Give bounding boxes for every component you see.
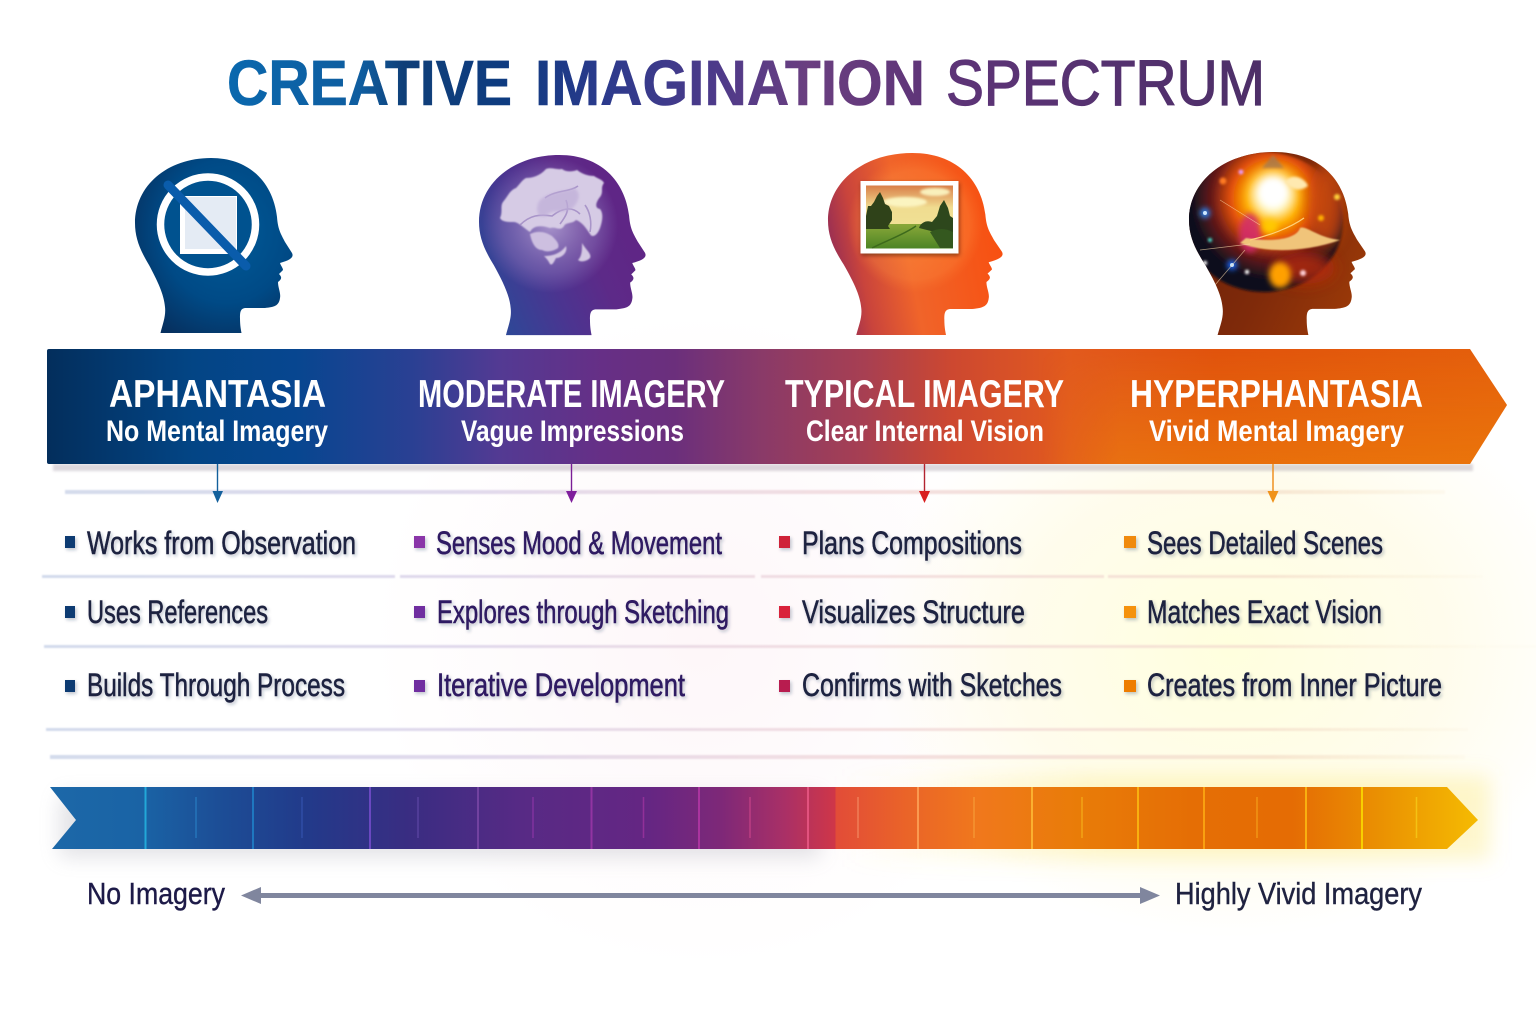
list: typical imagery traits: Plans Compositions: [802, 525, 1022, 561]
list: aphantasia traits: Builds Through Process: [87, 667, 345, 703]
label: highly vivid imagery: Highly Vivid Imagery: [1175, 876, 1422, 911]
list: moderate imagery traits: Senses Mood & Movement: [436, 525, 722, 561]
arrow: moderate: [566, 464, 577, 503]
list: moderate imagery traits: Explores through Sketching: [437, 594, 729, 630]
arrow: aphantasia: [212, 464, 223, 503]
arrow: hyper: [1268, 464, 1278, 503]
list: typical imagery traits: Visualizes Structure: [802, 594, 1025, 630]
title: [227, 47, 1265, 119]
heading: typical imagery: [785, 373, 1064, 448]
list: hyperphantasia traits: Creates from Inner Picture: [1147, 667, 1442, 703]
heading: hyperphantasia: [1130, 373, 1423, 448]
tick marks: [146, 787, 1416, 849]
heading: moderate imagery: MODERATE IMAGERY: [418, 373, 725, 416]
chart: imagery gradient scale bar: [50, 787, 1478, 849]
list: hyperphantasia traits: Sees Detailed Scenes: [1147, 525, 1383, 561]
heading: moderate imagery: [418, 373, 725, 448]
list: aphantasia traits: Works from Observation: [87, 525, 356, 561]
icon: aphantasia head with crossed-out picture: [135, 158, 293, 333]
heading: aphantasia: [106, 373, 328, 448]
heading: hyperphantasia: Vivid Mental Imagery: [1149, 415, 1404, 448]
list: moderate imagery traits: Iterative Development: [437, 667, 685, 703]
arrow: typical: [919, 464, 930, 503]
title: IMAGINATION: [535, 47, 925, 119]
arrow: spectrum direction: [241, 887, 1160, 904]
list: hyperphantasia traits: Matches Exact Vision: [1147, 594, 1382, 630]
label: no imagery: No Imagery: [87, 876, 225, 911]
banner shadow: [53, 464, 1473, 471]
heading: hyperphantasia: HYPERPHANTASIA: [1130, 373, 1423, 416]
list: aphantasia traits: [65, 525, 356, 703]
title: CREATIVE: [227, 47, 512, 119]
panel: spectrum header banner: [47, 349, 1507, 464]
heading: moderate imagery: Vague Impressions: [461, 415, 684, 448]
list: aphantasia traits: Uses References: [87, 594, 268, 630]
title: SPECTRUM: [946, 47, 1265, 119]
list: moderate imagery traits: [414, 525, 729, 703]
list: typical imagery traits: [779, 525, 1062, 703]
heading: aphantasia: No Mental Imagery: [106, 415, 328, 448]
icon: typical imagery head with landscape picture: [828, 153, 1003, 335]
heading: typical imagery: TYPICAL IMAGERY: [785, 373, 1064, 416]
heading: typical imagery: Clear Internal Vision: [806, 415, 1044, 448]
icon: hyperphantasia head with explosive vivid imagery: [1185, 152, 1366, 335]
heading: aphantasia: APHANTASIA: [109, 373, 326, 416]
list: typical imagery traits: Confirms with Sketches: [802, 667, 1062, 703]
list: hyperphantasia traits: [1124, 525, 1442, 703]
icon: moderate imagery head with cloud: [479, 155, 646, 335]
